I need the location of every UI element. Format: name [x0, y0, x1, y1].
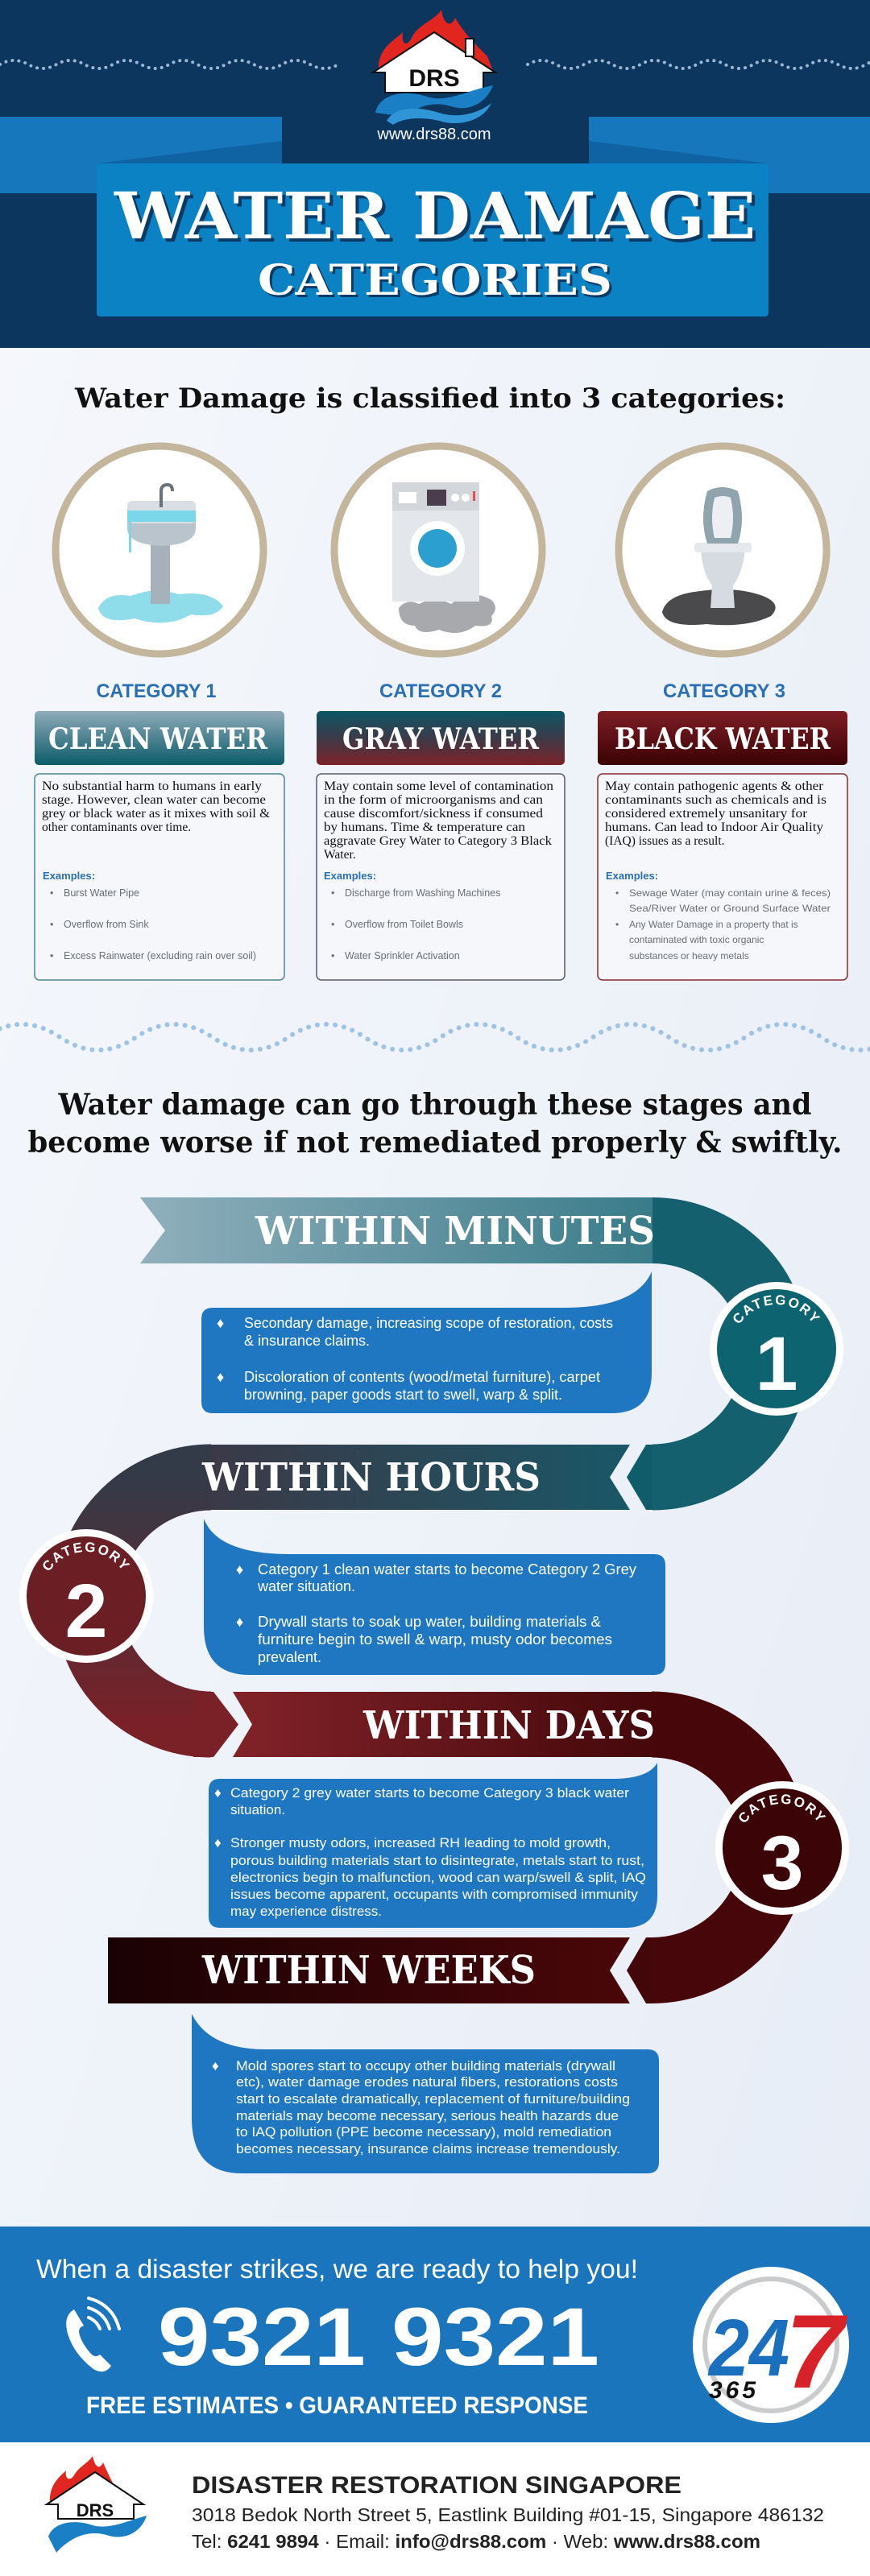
bubble: minutes: & insurance claims. [244, 1333, 370, 1349]
ribbon: within days: WITHIN DAYS [362, 1703, 655, 1748]
card: clean water: No substantial harm to humans in early [42, 779, 262, 793]
card: gray water: in the form of microorganisms and can [324, 793, 543, 807]
footer: 3018 Bedok North Street 5, Eastlink Building #01-15, Singapore 486132 [192, 2504, 824, 2525]
card: clean water: Overflow from Sink [64, 919, 149, 930]
ribbon: within hours: WITHIN HOURS [201, 1455, 541, 1500]
ribbon: within minutes [140, 1197, 776, 1510]
bubble: hours: ♦ [236, 1561, 243, 1577]
bubble: minutes [201, 1271, 652, 1413]
card: clean water: stage. However, clean water can become [42, 793, 266, 807]
bubble: minutes: Discoloration of contents (wood/metal furniture), carpet [244, 1369, 600, 1385]
category 2 label: CATEGORY 2 [379, 680, 502, 702]
ribbon: within days [233, 1692, 775, 2003]
badge: category 3: CATEGORY [740, 1794, 826, 1822]
card: gray water: by humans. Time & temperature can [324, 821, 525, 834]
bubble: weeks: start to escalate dramatically, replacement of furniture/building [236, 2091, 630, 2107]
ribbon: within weeks [108, 1937, 630, 2003]
card: clean water [35, 774, 284, 980]
card: gray water: Discharge from Washing Machines [345, 887, 500, 899]
icon: washing machine [334, 446, 542, 654]
title box: CATEGORIES [258, 256, 612, 305]
bubble: days: porous building materials start to disintegrate, metals start to rust, [230, 1853, 644, 1868]
card: black water: contaminated with toxic organic [629, 934, 764, 945]
badge: category 3 [715, 1781, 849, 1915]
badge: 24/7 365: 365 [709, 2377, 759, 2404]
card: black water [598, 774, 847, 980]
card: black water: Sewage Water (may contain urine & feces) [629, 887, 831, 899]
header: clean water [35, 711, 284, 765]
card: black water: considered extremely unsanitary for [605, 807, 808, 821]
card: gray water: • [331, 950, 334, 961]
card: clean water: Excess Rainwater (excluding rain over soil) [64, 950, 256, 961]
card: black water: • [615, 919, 619, 930]
badge: category 2: CATEGORY [44, 1542, 130, 1570]
logo: DRS header: DRS [408, 65, 460, 92]
title box: CATEGORIES [260, 258, 615, 308]
card: black water: • [615, 887, 619, 899]
card: black water: Examples: [606, 870, 658, 882]
bubble: days: electronics begin to malfunction, wood can warp/swell & split, IAQ [230, 1870, 646, 1885]
card: clean water: • [50, 919, 53, 930]
footer [0, 2442, 870, 2576]
bubble: weeks: materials may become necessary, serious health hazards due [236, 2108, 619, 2123]
contact band: 9321 9321 [158, 2291, 599, 2383]
bubble: days: issues become apparent, occupants with compromised immunity [230, 1887, 639, 1902]
bubble: hours [204, 1519, 665, 1675]
card: clean water: grey or black water as it mixes with soil & [42, 807, 270, 821]
header: black water: BLACK WATER [615, 722, 831, 756]
stages heading: Water damage can go through these stages and [58, 1088, 812, 1122]
footer: DISASTER RESTORATION SINGAPORE [192, 2472, 682, 2499]
bubble: hours: Drywall starts to soak up water, building materials & [258, 1614, 601, 1630]
stages heading [27, 1088, 843, 1160]
card: black water: (IAQ) issues as a result. [605, 834, 725, 848]
bubble: days: situation. [230, 1802, 285, 1817]
bubble: minutes: ♦ [217, 1315, 224, 1331]
card: gray water: Overflow from Toilet Bowls [345, 919, 463, 930]
badge: category 2 [19, 1529, 153, 1663]
card: clean water: • [50, 887, 53, 899]
bubble: minutes: browning, paper goods start to swell, warp & split. [244, 1387, 562, 1403]
bubble: hours: prevalent. [258, 1649, 321, 1665]
badge: category 1: 1 [756, 1321, 798, 1407]
bubble: days: Stronger musty odors, increased RH leading to mold growth, [230, 1835, 611, 1850]
header: clean water: CLEAN WATER [48, 722, 268, 756]
bubble: minutes: Secondary damage, increasing scope of restoration, costs [244, 1315, 613, 1331]
card: gray water [317, 774, 565, 980]
bubble: weeks: to IAQ pollution (PPE become necessary), mold remediation [236, 2124, 611, 2140]
title box: WATER DAMAGE [117, 181, 759, 257]
card: gray water: • [331, 887, 334, 899]
badge: category 1: CATEGORY [733, 1295, 820, 1323]
header background [0, 0, 870, 348]
badge: 24/7 365: 24 [707, 2303, 789, 2393]
header: black water [598, 711, 847, 765]
header: gray water: GRAY WATER [342, 722, 540, 756]
badge: 24/7 365 [693, 2267, 849, 2423]
title box: WATER DAMAGE [114, 178, 756, 254]
card: gray water: Water Sprinkler Activation [345, 950, 460, 961]
category 1 label: CATEGORY 1 [97, 680, 216, 702]
bubble: hours: water situation. [257, 1578, 355, 1594]
badge: category 1 [710, 1282, 843, 1416]
icon: toilet [619, 446, 826, 654]
bubble: weeks [192, 2014, 659, 2173]
footer logo: DRS [77, 2500, 114, 2520]
bubble: days: may experience distress. [230, 1904, 382, 1919]
bubble: hours: ♦ [236, 1614, 243, 1630]
bubble: days [209, 1763, 657, 1928]
badge: 24/7 365: 7 [785, 2293, 848, 2410]
card: black water: Sea/River Water or Ground Surface Water [629, 903, 831, 914]
bubble: weeks: ♦ [212, 2058, 219, 2074]
card: black water: Any Water Damage in a property that is [629, 919, 798, 930]
card: gray water: Water. [324, 848, 356, 862]
card: clean water: other contaminants over time. [42, 821, 191, 834]
badge: category 3: 3 [761, 1821, 803, 1906]
logo: DRS header: www.drs88.com [376, 126, 491, 143]
card: clean water: • [50, 950, 53, 961]
card: black water: contaminants such as chemicals and is [605, 793, 826, 807]
card: gray water: cause discomfort/sickness if consumed [324, 807, 543, 821]
contact band [0, 2227, 870, 2442]
bubble: hours: furniture begin to swell & warp, musty odor becomes [258, 1631, 612, 1648]
card: gray water: Examples: [324, 870, 376, 882]
icon: sink [56, 446, 263, 654]
bubble: weeks: Mold spores start to occupy other building materials (drywall [236, 2058, 615, 2074]
card: gray water: May contain some level of contamination [324, 779, 553, 793]
bubble: days: Category 2 grey water starts to become Category 3 black water [230, 1785, 629, 1801]
bubble: days: ♦ [214, 1785, 222, 1801]
badge: category 2: 2 [65, 1569, 107, 1654]
bubble: weeks: etc), water damage erodes natural fibers, restorations costs [236, 2074, 618, 2090]
card: clean water: Examples: [43, 870, 95, 882]
bubble: weeks: becomes necessary, insurance claims increase tremendously. [236, 2141, 620, 2156]
contact band: When a disaster strikes, we are ready to help you! [36, 2254, 638, 2284]
footer logo [47, 2456, 147, 2553]
ribbon: within hours [87, 1445, 630, 1757]
logo: DRS header [373, 10, 495, 143]
card: black water: substances or heavy metals [629, 950, 749, 961]
icon: phone [66, 2298, 119, 2371]
card: black water: humans. Can lead to Indoor Air Quality [605, 821, 823, 834]
ribbon: within weeks: WITHIN WEEKS [201, 1948, 536, 1993]
title box [97, 163, 768, 316]
category 3 label: CATEGORY 3 [663, 680, 785, 702]
card: black water: May contain pathogenic agents & other [605, 779, 824, 793]
card: gray water: • [331, 919, 334, 930]
ribbon: within minutes: WITHIN MINUTES [255, 1209, 655, 1254]
bubble: minutes: ♦ [217, 1369, 224, 1385]
header: gray water [317, 711, 565, 765]
bubble: hours: Category 1 clean water starts to become Category 2 Grey [258, 1561, 636, 1577]
footer: Tel: 6241 9894 · Email: info@drs88.com · Web: www.drs88.com [192, 2531, 760, 2552]
card: gray water: aggravate Grey Water to Category 3 Black [324, 834, 552, 848]
card: clean water: Burst Water Pipe [64, 887, 139, 899]
intro heading: Water Damage is classified into 3 categories: [74, 382, 785, 415]
bubble: days: ♦ [214, 1835, 222, 1850]
contact band: FREE ESTIMATES • GUARANTEED RESPONSE [86, 2392, 588, 2419]
stages heading: become worse if not remediated properly & swiftly. [27, 1126, 843, 1160]
